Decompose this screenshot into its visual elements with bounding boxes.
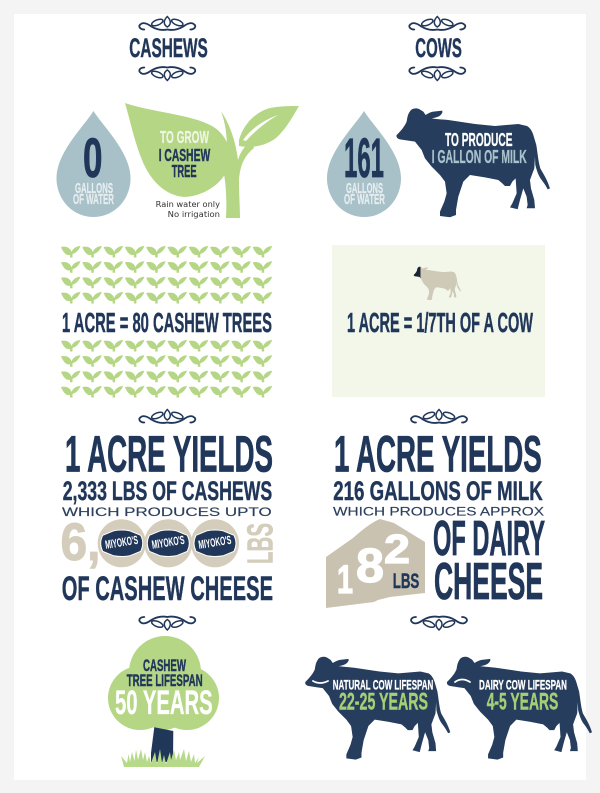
ornament: bottom flourish (139, 67, 195, 80)
icon: grass (121, 749, 205, 767)
leaf vein (243, 115, 278, 141)
cashew yield block: WHICH PRODUCES UPTO (62, 506, 272, 519)
cow: to produce 1 gallon of milk: I GALLON OF MILK (432, 146, 527, 167)
note: rain water: Rain water only (156, 200, 220, 209)
plant: cashew tree sprout: I CASHEW (159, 145, 210, 165)
icon: cheese wedge with 182 lbs: 8 (356, 540, 384, 593)
plant: cashew tree sprout (125, 103, 299, 219)
sprouts above label (61, 246, 272, 304)
icon: small leaf (239, 106, 299, 147)
ornament: top flourish (139, 16, 195, 30)
column heading: cashews (129, 16, 208, 80)
cow: dairy lifespan (447, 657, 592, 760)
cow yield block (326, 426, 545, 611)
lifespan text: CASHEW (143, 656, 187, 675)
ornament: cashew yield top (139, 410, 195, 423)
cashew yield block: 1 ACRE YIELDS (65, 426, 273, 483)
cow: natural lifespan (305, 657, 450, 760)
plant: cashew tree sprout: No irrigation (168, 210, 220, 219)
cow: natural lifespan: 22-25 YEARS (339, 688, 428, 715)
water drop: cashews 0 gallons: GALLONS (75, 181, 113, 197)
cashew yield block: OF CASHEW CHEESE (62, 570, 273, 608)
icon: cheese wedge with 182 lbs (326, 519, 425, 608)
icon: smile (313, 681, 328, 683)
cow: natural lifespan: NATURAL COW LIFESPAN (333, 677, 433, 692)
icon: trunk (151, 727, 173, 762)
icon: frown (455, 680, 470, 682)
icon: canopy (108, 636, 219, 730)
tree: cashew lifespan: TREE LIFESPAN (127, 671, 203, 690)
icon: small cow (414, 267, 461, 300)
tree: cashew lifespan: 50 YEARS (115, 684, 213, 722)
cow: to produce 1 gallon of milk: TO PRODUCE (445, 129, 512, 150)
6,000 lbs with logos (60, 513, 281, 572)
ornament: cow yield bottom (411, 617, 467, 630)
water drop: cows 161 gallons (327, 111, 401, 217)
ornament: bottom flourish (409, 67, 465, 80)
icon: large leaf (125, 103, 230, 197)
water drop: cashews 0 gallons (56, 111, 131, 217)
cashew trees grid (61, 246, 272, 398)
cashew yield block: 2,333 LBS OF CASHEWS (63, 476, 272, 506)
6,000 lbs with logos: LBS (240, 523, 281, 564)
label: 80 cashew trees: 1 ACRE = 80 CASHEW TREES (62, 307, 272, 338)
ornament: top flourish (409, 16, 465, 30)
cow: to produce 1 gallon of milk (396, 108, 550, 217)
icon: cheese wedge with 182 lbs: 2 (384, 526, 410, 572)
water drop: cows 161 gallons: OF WATER (344, 192, 385, 208)
cow yield block: WHICH PRODUCES APPROX (333, 506, 544, 518)
heading text: COWS (415, 33, 462, 63)
icon: cheese wedge with 182 lbs: LBS (393, 570, 419, 593)
tree: cashew lifespan (108, 636, 219, 767)
ornament: cow yield top (411, 410, 467, 423)
water drop: cows 161 gallons: 161 (344, 126, 384, 189)
water drop: cows 161 gallons: GALLONS (346, 181, 383, 197)
leaf text: TO GROW (160, 127, 209, 147)
water drop: cashews 0 gallons: 0 (83, 126, 102, 189)
cashew yield block (60, 426, 281, 608)
6,000 lbs with logos: 6, (60, 513, 100, 572)
heading text: CASHEWS (129, 33, 208, 63)
icon: stem (204, 111, 254, 218)
ornament: cashew yield bottom (139, 617, 195, 630)
icon: cheese wedge with 182 lbs: 1 (337, 558, 353, 602)
column heading: cows (409, 16, 465, 80)
water drop: cashews 0 gallons: OF WATER (73, 192, 114, 208)
panel: one seventh of a cow (332, 245, 545, 397)
plant: cashew tree sprout: TREE (172, 161, 197, 181)
sprouts below label (61, 340, 272, 398)
